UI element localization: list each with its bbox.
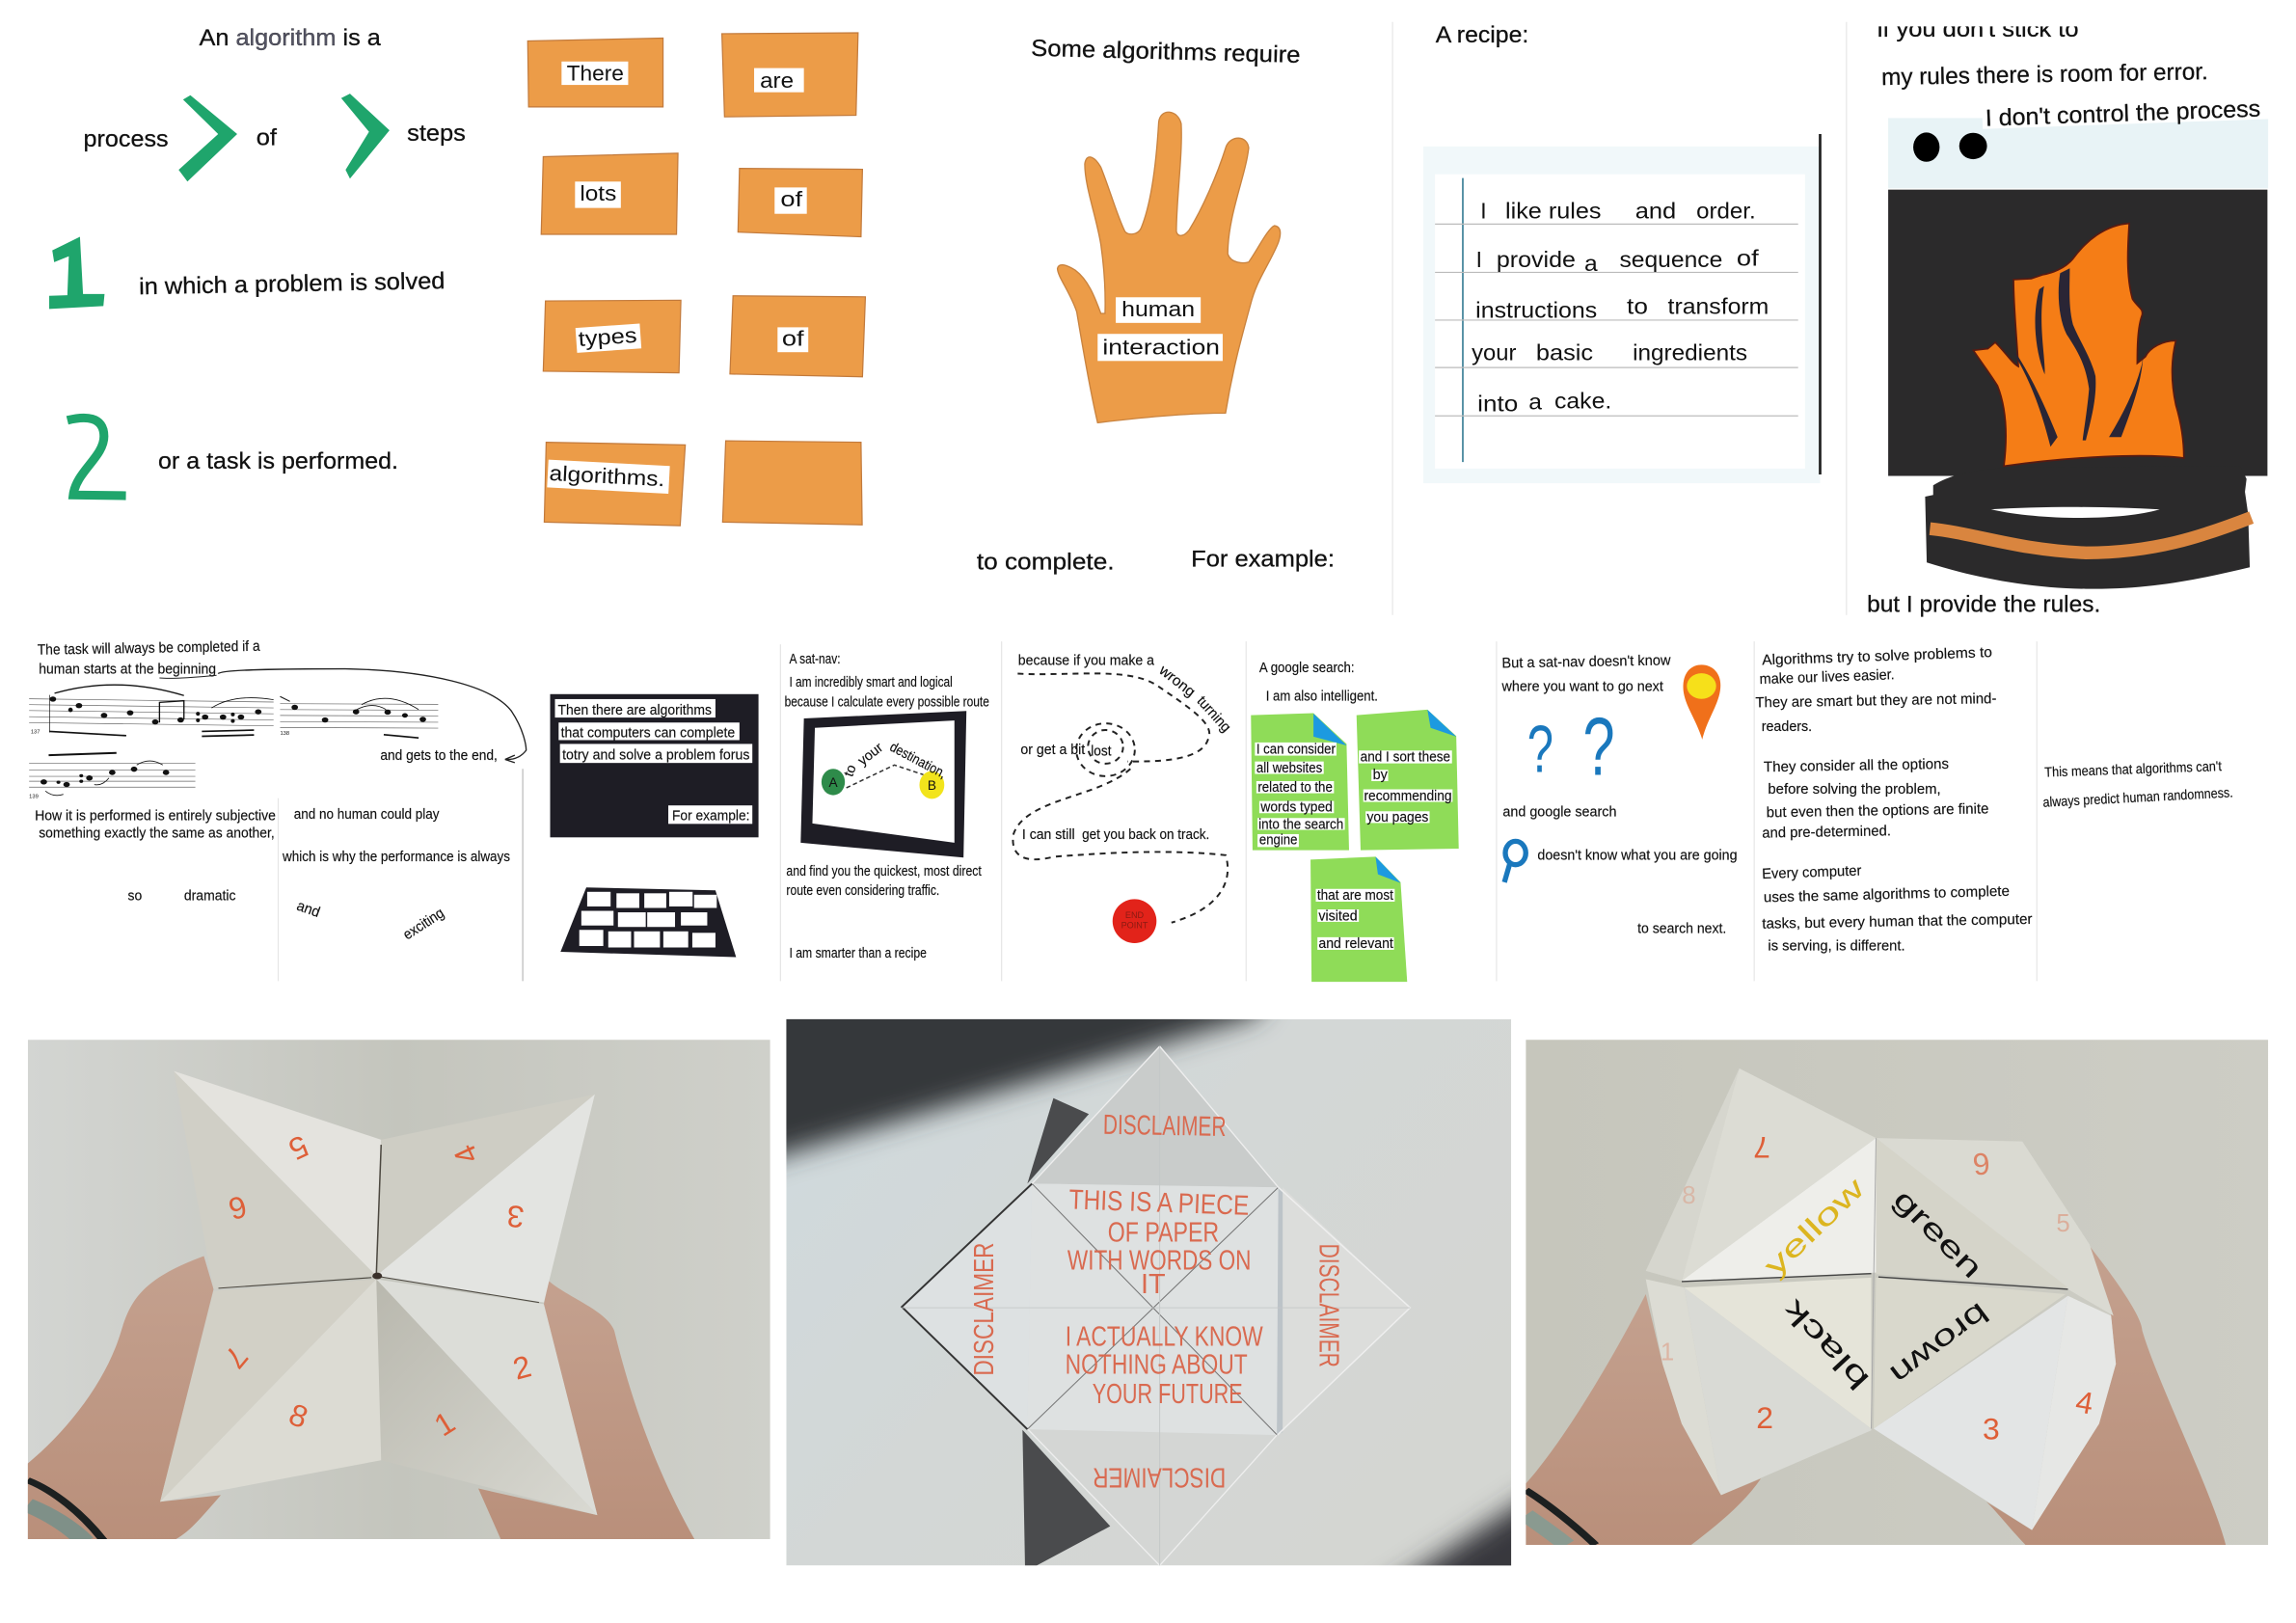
fortune teller numbers: 6 [1971,1146,1991,1182]
panel: human randomness [2042,759,2233,811]
card: websites document: related to the [1257,780,1333,796]
heading: a recipe: A recipe: [1436,22,1528,48]
icon: end point: END [1125,910,1145,920]
recipe text line 2: sequence [1619,247,1722,272]
recipe text line 2: a [1584,251,1598,276]
numbers on the flaps [217,1128,535,1443]
recipe text line 4: ingredients [1633,340,1747,365]
card: sort document: recommending [1364,789,1452,804]
fortune teller numbers: 8 [1682,1182,1696,1209]
label: to try and solve a problem for us: totry and solve a problem forus [562,746,750,763]
card: lots [541,153,678,234]
text: i can still get you back on track [1022,826,1209,843]
recipe text line 3: instructions [1475,298,1597,323]
text paragraph three: uses the same algorithms to complete [1764,883,2010,906]
paper shadows [1022,1098,1110,1565]
text paragraph one [1755,644,1996,735]
text paragraph one: Algorithms try to solve problems to [1762,644,1992,668]
text: but i provide the rules: but I provide the rules. [1867,592,2100,618]
fortune teller numbers: 1 [1661,1339,1674,1366]
paper message: i actually know nothing: NOTHING ABOUT [1066,1349,1248,1380]
icon: magnifying glass [1504,841,1526,882]
label: interaction: interaction [1102,335,1220,359]
colour word: black: black [1776,1292,1876,1395]
card: relevant document [1310,856,1407,982]
shadow top left [786,1018,1278,1177]
icon: sat-nav screen: A [828,775,838,790]
text: human starts at the beginning: human starts at the beginning [39,662,216,678]
recipe text line 3: transform [1668,294,1769,319]
panel: recipe [1423,22,1820,483]
recipe text line 5: into [1477,392,1518,417]
card: of [730,296,865,377]
paper message: this is a piece of paper: OF PAPER [1108,1218,1219,1249]
recipe text line 2: provide [1497,247,1576,272]
photo wall background [28,1040,770,1539]
icon: sat-nav screen: to [841,763,860,779]
text: wrong turning: wrong [1155,662,1199,700]
card: websites document: I can consider [1256,742,1336,757]
disclaimer text right: DISCLAIMER [1312,1244,1343,1367]
fortune teller numbers: 2 [1756,1400,1773,1435]
card: of: of [782,326,805,350]
recipe text line 1: and [1635,198,1676,223]
recipe text line 3: to [1627,294,1648,319]
paper message: this is a piece of paper: IT [1141,1269,1166,1300]
card: sort document: you pages [1367,810,1428,825]
text: if you don't stick to: if you don't stick to [1877,16,2079,42]
text paragraph one: readers. [1762,718,1812,735]
oven door dark panel [1888,190,2267,476]
right hand [478,1281,697,1543]
recipe text line 1: order. [1696,198,1756,223]
panel: orange word cards [527,33,865,526]
text paragraph two: They consider all the options [1764,756,1950,775]
text: which is why the performance: which is why the performance is always [282,849,510,865]
recipe text line 4 [1472,340,1747,365]
icon: end point: POINT [1121,921,1148,931]
card: of [738,169,862,237]
card: relevant document: and relevant [1318,936,1393,952]
icon: keyboard [560,887,736,958]
chart: music staff three [29,753,196,800]
text paragraph two: but even then the options are finite [1767,800,1989,821]
text: i can still get you back on track: get you back on track. [1082,826,1209,843]
dashed route lower [1013,769,1228,923]
text: for example: For example: [1191,547,1335,573]
text paragraph three: Every computer [1762,863,1862,882]
icon: question marks [1527,701,1615,793]
text paragraph one: They are smart but they are not mind- [1755,690,1996,711]
recipe text line 4: basic [1536,340,1593,365]
text: i am incredibly smart: I am incredibly smart and logical [789,674,953,690]
card: websites document: engine [1259,832,1297,848]
paper message: i actually know nothing: I ACTUALLY KNOW [1066,1322,1263,1353]
text: i am smarter than a recipe: I am smarter than a recipe [789,945,927,961]
recipe text line 5 [1477,389,1611,417]
card: are [722,33,858,117]
text: in which a problem is solved: in which a problem is solved [139,268,446,300]
card: are: are [760,68,794,93]
panel: oven on fire [1867,16,2270,618]
fortune teller numbers [1661,1130,2096,1447]
recipe text line 4: your [1472,340,1517,365]
chart: music staff three: 139 [29,795,39,800]
bracelet [1526,1490,1595,1545]
text: my rules there is room for error: my rules there is room for error. [1881,59,2208,91]
panel: sat-nav smart [785,651,989,961]
recipe text line 3 [1475,294,1769,323]
fortune teller numbers: 4 [2073,1384,2096,1421]
paper message: i actually know nothing: YOUR FUTURE [1093,1379,1243,1410]
card: sort document: by [1373,768,1389,783]
bracelet [28,1480,104,1542]
recipe text line 1 [1480,198,1756,223]
text: because if you make a: because if you make a [1018,652,1155,668]
panel: algorithms solve problems [1755,644,2033,955]
chart: music staff two: 138 [280,731,289,737]
text paragraph three [1762,863,2033,955]
numbers on the flaps: 8 [284,1396,312,1435]
card: There [527,38,663,107]
icon: flames [1973,224,2184,466]
photo: fortune teller disclaimer side [786,1018,1512,1566]
text: this means that algorithms can't: This means that algorithms can't [2044,759,2222,781]
disclaimer text top: DISCLAIMER [1103,1110,1227,1143]
colour word: brown: brown [1883,1296,1994,1391]
chart: music staff two [280,696,438,738]
icon: sat-nav screen: your [855,740,886,769]
icon: orange hand [1058,112,1281,422]
paper message: this is a piece of paper: THIS IS A PIECE [1068,1184,1250,1222]
panel: google search [1251,660,1459,982]
icon: sat-nav screen: destination, [887,740,949,782]
card: sort document [1357,710,1459,851]
chart: music staff one: 137 [31,729,40,735]
card: relevant document: visited [1318,908,1358,924]
dashed loop around lost [1076,723,1135,776]
colour word: green: green [1887,1183,1988,1285]
card: types [543,300,681,373]
card: relevant document: that are most [1317,888,1393,904]
text paragraph three: is serving, is different. [1768,938,1905,955]
text: and gets to the end: and gets to the end, [380,747,498,764]
label: interaction [1097,334,1223,361]
text: route even considering traffic: route even considering traffic. [786,882,939,899]
text: how it is performed: How it is performed is entirely subjective [35,807,276,824]
numbers on the flaps: 3 [505,1199,526,1234]
card: algorithms: algorithms. [549,461,665,491]
panel: wrong turning route [1013,652,1234,943]
label: for example: For example: [672,807,749,824]
fortune teller numbers: 5 [2056,1210,2070,1237]
card: of: of [780,187,803,211]
text: of: of [257,124,277,150]
photo wall background [1526,1040,2268,1545]
label: that computers can complete: that computers can complete [561,725,735,742]
icon: green number two [68,418,126,496]
text: wrong turning [1155,662,1234,736]
numbers on the flaps: 5 [284,1128,313,1167]
icon: green chevron one [178,95,237,181]
icon: sat-nav screen: B [928,778,936,793]
text: i am also intelligent: I am also intelligent. [1266,689,1378,705]
card: lots: lots [580,181,616,205]
recipe text line 2: I [1476,247,1482,272]
icon: sat-nav screen [800,711,966,857]
text: doesn't know what you are going: doesn't know what you are going [1537,847,1738,863]
text: to complete: to complete. [977,550,1115,576]
text: or get a bit lost [1020,742,1112,760]
text: but a sat-nav doesn't know: But a sat-nav doesn't know [1501,652,1671,671]
icon: oven knobs [1913,132,1987,162]
text: and google search: and google search [1502,804,1616,821]
dashed route upper [1017,673,1209,762]
shadow bottom right [1386,1483,1512,1566]
text strip: i don't control the process: I don't control the process [1985,96,2261,132]
dark screen [550,694,759,837]
disclaimer text bottom: DISCLAIMER [1093,1461,1226,1492]
colour word: yellow: yellow [1758,1173,1871,1283]
text: always predict human randomness: always predict human randomness. [2042,785,2233,811]
paper message: this is a piece of paper [1067,1190,1250,1293]
text: and: and [294,898,322,921]
numbers on the flaps: 2 [509,1348,535,1387]
numbers on the flaps: 7 [217,1339,255,1375]
card: websites document: into the search [1258,817,1343,832]
text: or get a bit lost: or get a bit [1020,742,1086,758]
numbers on the flaps: 6 [225,1189,251,1227]
paper message: this is a piece of paper: WITH WORDS ON [1067,1246,1251,1277]
text: because i calculate: because I calculate every possible route [785,694,989,711]
heading: an algorithm is a: An algorithm is a [200,25,381,51]
numbers on the flaps: 4 [446,1140,485,1170]
paper message: i actually know nothing [1067,1326,1263,1404]
panel: sat-nav doesn't know [1501,652,1738,936]
text paragraph two: and pre-determined. [1762,823,1891,842]
text: or get a bit lost: lost [1091,744,1112,760]
disclaimer text left: DISCLAIMER [969,1242,1000,1376]
arrow: curved line to the end [159,669,527,763]
text: so: so [128,887,142,904]
recipe text line 5: cake. [1554,389,1611,414]
text: or a task is performed: or a task is performed. [158,448,398,474]
heading: a google search: A google search: [1259,660,1355,676]
text: the task will always be completed: The task will always be completed if a [38,638,260,659]
heading: a sat-nav: A sat-nav: [789,651,841,667]
label: then there are algorithms: Then there are algorithms [558,702,712,718]
text: exciting: exciting [400,905,447,943]
text: and no human could play: and no human could play [294,806,440,823]
photo: fortune teller with colours [1526,1040,2268,1547]
icon: question marks: ? [1582,701,1615,793]
panel: sheet music [29,638,527,943]
chart: music staff one [29,685,274,736]
card: algorithms [544,443,686,526]
icon: question marks: ? [1527,711,1553,786]
card: websites document [1251,714,1349,851]
photo wall background [786,1019,1511,1565]
paper folded diamond [902,1046,1410,1565]
panel: computer algorithms [550,694,759,958]
heading: some algorithms require: Some algorithms require [1031,36,1301,68]
recipe text line 2 [1476,246,1760,276]
text: and find you the quickest: and find you the quickest, most direct [786,863,982,879]
text paragraph two [1762,756,1989,842]
left hand [28,1256,221,1543]
photo: fortune teller with numbers [28,1040,770,1543]
text: steps: steps [407,121,466,147]
card: websites document: all websites [1256,761,1322,776]
right hand [1986,1246,2227,1547]
recipe text line 2: of [1737,246,1760,271]
oven control panel [1888,118,2268,188]
text paragraph two: before solving the problem, [1768,781,1941,798]
card: websites document: words typed [1259,799,1333,815]
paper fortune teller open [1646,1068,2116,1530]
card: There: There [567,62,624,86]
text: something exactly the same: something exactly the same as another, [39,825,275,842]
text: wrong turning: turning [1194,693,1234,736]
paper fortune teller folded outer [160,1071,597,1515]
text: dramatic: dramatic [184,887,236,904]
recipe text line 1: like rules [1505,198,1601,223]
panel: human interaction hand [977,36,1335,576]
icon: map pin [1683,664,1720,740]
text: i can still get you back on track: I can still [1022,826,1075,843]
recipe text line 5: a [1528,389,1542,414]
left hand [1526,1294,1761,1547]
card: types: types [578,323,637,351]
card: sort document: and I sort these [1361,750,1450,766]
icon: end point [1113,899,1156,943]
fortune teller numbers: 7 [1753,1130,1770,1165]
icon: burnt cake [1925,466,2252,589]
recipe text line 1: I [1480,198,1487,223]
card: empty [722,441,862,525]
panel: algorithm definition [49,25,466,496]
numbers on the flaps: 1 [428,1404,461,1443]
text paragraph one: make our lives easier. [1759,666,1895,688]
text: where you want to go next: where you want to go next [1501,679,1664,695]
fortune teller numbers: 3 [1983,1412,2000,1447]
text: to search next: to search next. [1637,920,1726,936]
icon: green number one [49,237,104,309]
text: process: process [84,126,169,152]
text paragraph three: tasks, but every human that the computer [1762,911,2033,933]
label: human: human [1121,297,1195,321]
recipe notepaper [1423,134,1820,483]
icon: green chevron two [341,94,390,178]
